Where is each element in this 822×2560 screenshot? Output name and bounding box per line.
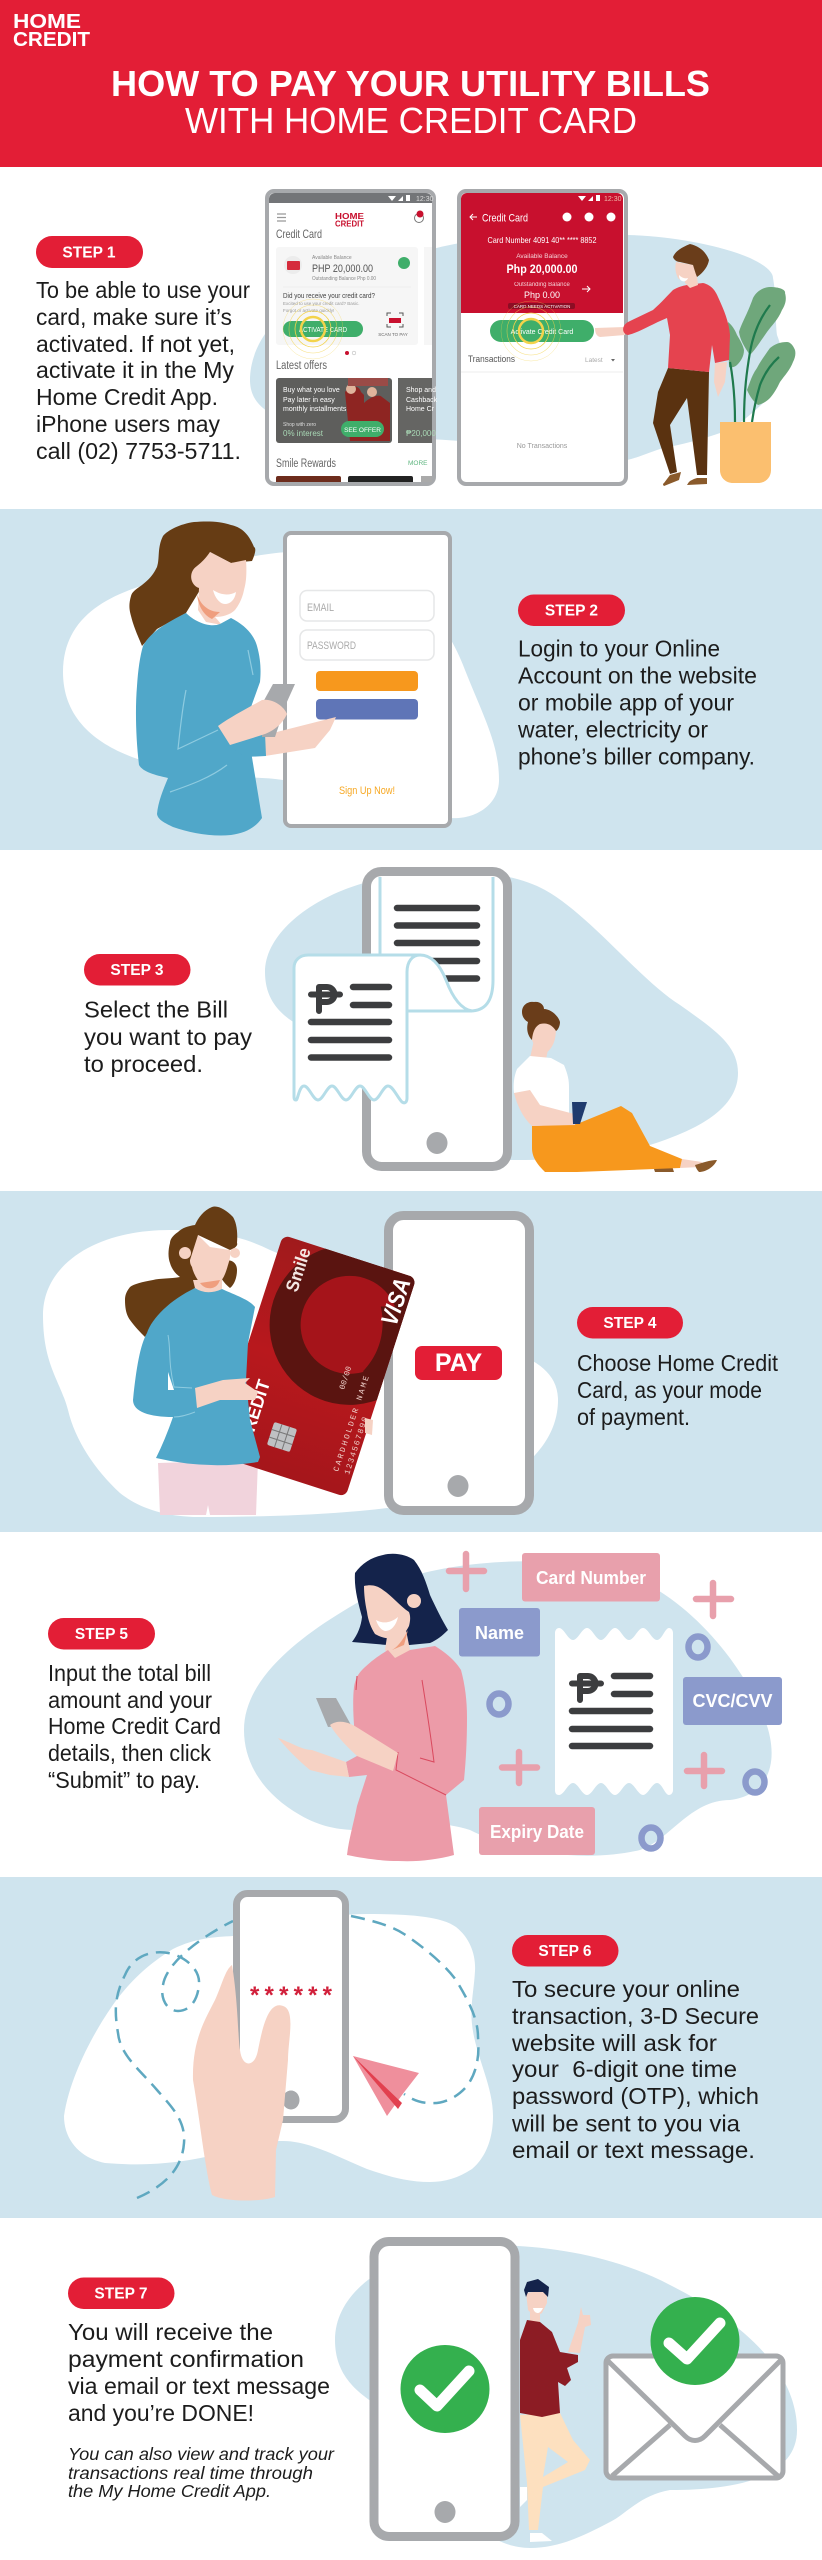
step 5 text: “Submit” to pay. [48, 1767, 200, 1793]
step 1 text: Home Credit App. [36, 384, 218, 410]
step 2 text [517, 636, 757, 770]
step 3 badge [84, 954, 190, 986]
step 6 text: To secure your online [512, 1976, 740, 2002]
phone: activate credit card screen: Php 20,000.00 [506, 262, 578, 276]
phone: activate credit card screen: Activate Credit Card [511, 329, 573, 336]
step 4 text: Card, as your mode [577, 1377, 762, 1403]
step 5 text: details, then click [48, 1740, 211, 1766]
step 2 text: phone’s biller company. [518, 744, 755, 770]
phone: success screen [374, 2242, 515, 2536]
step 3 text: to proceed. [84, 1051, 203, 1077]
step 1 badge [36, 236, 143, 268]
field label: expiry date: Expiry Date [490, 1822, 584, 1842]
step 5 text [48, 1660, 221, 1793]
phone: bill list [366, 872, 508, 1166]
pay button: PAY [435, 1349, 482, 1377]
step 3 text [84, 996, 253, 1077]
illustration: hand holding phone [193, 1965, 290, 2201]
field label: name [459, 1608, 540, 1656]
phone: credit card home screen: Outstanding Balance Php 0.00 [312, 276, 376, 282]
phone: credit card home screen: Did you receive your credit card? [283, 291, 375, 300]
step 6 text: password (OTP), which [512, 2083, 759, 2109]
step 5 text: amount and your [48, 1687, 212, 1713]
phone: credit card home screen: 0% interest [283, 429, 324, 438]
illustration: bill receipt [294, 877, 493, 1103]
icon: paper plane [353, 2056, 419, 2116]
phone: pay screen [388, 1216, 530, 1510]
step 1 text: activated. If not yet, [36, 331, 235, 357]
logo: Home Credit: HOME [13, 11, 81, 33]
phone: login screen: Sign Up Now! [339, 785, 395, 797]
step 1 text: call (02) 7753-5711. [36, 438, 241, 464]
panel: step 2 [0, 509, 822, 850]
phone: credit card home screen: PHP 20,000.00 [312, 263, 373, 275]
illustration: potted plant [720, 287, 795, 483]
field label: CVC/CVV [683, 1677, 782, 1725]
step 5 text: Home Credit Card [48, 1713, 221, 1739]
phone: credit card home screen: Home Cr [406, 406, 435, 413]
step 6 text: will be sent to you via [511, 2110, 740, 2136]
phone: credit card home screen: Smile Rewards [276, 458, 336, 470]
step 7 text: and you’re DONE! [68, 2400, 254, 2426]
step 1 text: card, make sure it’s [36, 304, 232, 330]
step 3 text: you want to pay [84, 1024, 253, 1050]
step 4 badge: STEP 4 [603, 1315, 657, 1332]
title: HOW TO PAY YOUR UTILITY BILLS [111, 63, 710, 104]
step 6 text: transaction, 3-D Secure [512, 2003, 759, 2029]
title [111, 63, 710, 141]
phone: activate credit card screen: CARD NEEDS ACTIVATION [514, 304, 570, 309]
card text and chip: HOME [220, 1388, 254, 1441]
step 5 badge: STEP 5 [75, 1626, 128, 1643]
phone: activate credit card screen: Credit Card [482, 212, 528, 224]
phone: credit card home screen: MORE [408, 460, 428, 467]
step 7 badge: STEP 7 [94, 2286, 148, 2302]
step 3 badge: STEP 3 [110, 962, 164, 979]
field label: name: Name [475, 1623, 524, 1643]
card text and chip: 1234567890 [343, 1416, 370, 1476]
step 7 text: payment confirmation [68, 2346, 304, 2372]
illustration: woman logging in [129, 521, 336, 836]
step 5 text: Input the total bill [48, 1660, 211, 1686]
phone: credit card home screen: Forgot or activate quickly! [283, 308, 334, 313]
step 2 badge [518, 594, 625, 626]
blob: step 2 white shape [63, 551, 499, 818]
phone: activate credit card screen: Outstanding Balance [514, 282, 571, 288]
illustration: man tapping phone [595, 244, 730, 486]
card text and chip: CARDHOLDER NAME [332, 1375, 372, 1473]
step 7 badge [68, 2278, 174, 2309]
step 1 text: iPhone users may [36, 411, 220, 437]
header banner [0, 0, 822, 167]
decorative rings [490, 1636, 764, 1848]
step 6 text: email or text message. [512, 2137, 755, 2163]
blob: step 6 white shape [64, 1914, 493, 2182]
phone: credit card home screen: SCAN TO PAY [378, 332, 408, 337]
phone: login screen [285, 533, 450, 826]
field label: card number: Card Number [536, 1568, 646, 1588]
phone: OTP screen [236, 1894, 346, 2120]
step 7 text: You will receive the [68, 2319, 273, 2345]
illustration: woman pants and hair [125, 1207, 258, 1515]
step 1 text: To be able to use your [36, 277, 250, 303]
phone: credit card home screen: HOME [335, 211, 364, 221]
phone: activate credit card screen: 12:30 [604, 196, 622, 203]
step 7 text: via email or text message [68, 2373, 330, 2399]
card text and chip: CREDIT [235, 1377, 274, 1446]
step 5 badge [48, 1618, 155, 1650]
step 6 text: website will ask for [511, 2030, 717, 2056]
illustration: woman entering details [278, 1554, 467, 1861]
step 7 italic note: You can also view and track your [68, 2444, 335, 2464]
phone: credit card home screen: Cashback [406, 397, 438, 404]
panel: step 7 [68, 2242, 797, 2548]
blob: step 1 background [250, 233, 782, 461]
phone: activate credit card screen: Card Number 4091 40** **** 8852 [488, 235, 597, 245]
step 6 badge: STEP 6 [538, 1943, 592, 1960]
blob: step 4 white shape [43, 1230, 558, 1517]
phone: login screen: EMAIL [307, 602, 334, 614]
dashed flight path [116, 1916, 478, 2198]
phone: credit card home screen: Latest offers [276, 360, 327, 372]
illustration: man thumbs up [520, 2279, 591, 2542]
phone: credit card home screen [267, 191, 438, 484]
step 1 text [36, 277, 250, 464]
phone: activate credit card screen: Available Balance [516, 253, 568, 260]
step 6 text: your 6-digit one time [512, 2056, 737, 2082]
panel: step 3 [84, 871, 738, 1172]
step 1 badge: STEP 1 [62, 244, 116, 262]
phone: login screen: PASSWORD [307, 640, 356, 652]
phone: credit card home screen: CREDIT [335, 218, 365, 228]
panel: step 5 [48, 1553, 782, 1861]
phone: credit card home screen: Excited to use your credit card? Basic. [283, 301, 360, 306]
phone: credit card home screen: ₱20,000 [406, 429, 436, 438]
phone: credit card home screen: Shop with zero [283, 422, 316, 428]
field label: expiry date [479, 1807, 595, 1855]
step 2 text: Login to your Online [518, 636, 720, 662]
illustration: woman sitting with phone [514, 1002, 717, 1172]
illustration: woman sweater and hand [133, 1288, 260, 1465]
phone: credit card home screen: SEE OFFER [344, 427, 381, 434]
phone: credit card home screen: Pay later in easy [283, 397, 335, 404]
phone: credit card home screen: Buy what you love [283, 387, 340, 394]
phone: activate credit card screen [459, 191, 626, 484]
title: WITH HOME CREDIT CARD [185, 100, 637, 141]
step 2 text: water, electricity or [517, 716, 708, 742]
panel: step 1 [36, 191, 795, 486]
phone: activate credit card screen: Transactions [468, 354, 515, 365]
logo: Home Credit [13, 11, 90, 51]
step 2 text: or mobile app of your [518, 690, 734, 716]
step 4 text: Choose Home Credit [577, 1350, 779, 1376]
phone: credit card home screen: 12:30 [416, 196, 434, 203]
step 7 italic note: the My Home Credit App. [68, 2481, 271, 2501]
blob: step 5 background [244, 1561, 772, 1856]
phone: credit card home screen: ACTIVATE CARD [299, 327, 347, 334]
phone: activate credit card screen: Latest [585, 357, 603, 364]
step 2 text: Account on the website [518, 662, 757, 688]
step 3 text: Select the Bill [84, 996, 228, 1022]
phone: credit card home screen: Credit Card [276, 227, 322, 241]
card text and chip: Smile [282, 1245, 315, 1294]
phone: activate credit card screen: No Transactions [517, 443, 568, 450]
step 6 badge [512, 1935, 618, 1966]
step 4 text: of payment. [577, 1404, 690, 1430]
field label: CVC/CVV: CVC/CVV [692, 1691, 772, 1711]
phone: activate credit card screen: Php 0.00 [524, 290, 560, 300]
step 6 text [511, 1976, 759, 2163]
phone: OTP screen: ****** [250, 1982, 333, 2009]
panel: step 6 [0, 1877, 822, 2218]
icon: envelope with check [606, 2297, 783, 2478]
card text and chip: VISA [376, 1275, 417, 1329]
blob: step 3 background [265, 871, 738, 1160]
logo: Home Credit: CREDIT [13, 29, 90, 51]
step 7 italic note [68, 2444, 335, 2501]
step 4 badge [577, 1307, 683, 1338]
pay button [415, 1346, 502, 1380]
decorative plus signs [449, 1554, 731, 1786]
step 4 text [577, 1350, 779, 1430]
illustration: Home Credit Visa card [242, 1236, 414, 1496]
card text and chip [220, 1245, 417, 1476]
step 7 text [68, 2319, 330, 2426]
field label: card number [522, 1553, 660, 1602]
icon: check circle [400, 2345, 490, 2433]
step 7 italic note: transactions real time through [68, 2463, 313, 2483]
phone: credit card home screen: Shop and [406, 387, 436, 394]
phone: credit card home screen: monthly installments [283, 406, 347, 413]
receipt [555, 1628, 673, 1795]
step 1 text: activate it in the My [36, 357, 235, 383]
phone: credit card home screen: Available Balance [312, 255, 352, 261]
blob: step 7 background [335, 2245, 797, 2548]
card text and chip: 00/00 [338, 1365, 354, 1391]
panel: step 4 [0, 1191, 822, 1532]
step 2 badge: STEP 2 [545, 602, 598, 620]
